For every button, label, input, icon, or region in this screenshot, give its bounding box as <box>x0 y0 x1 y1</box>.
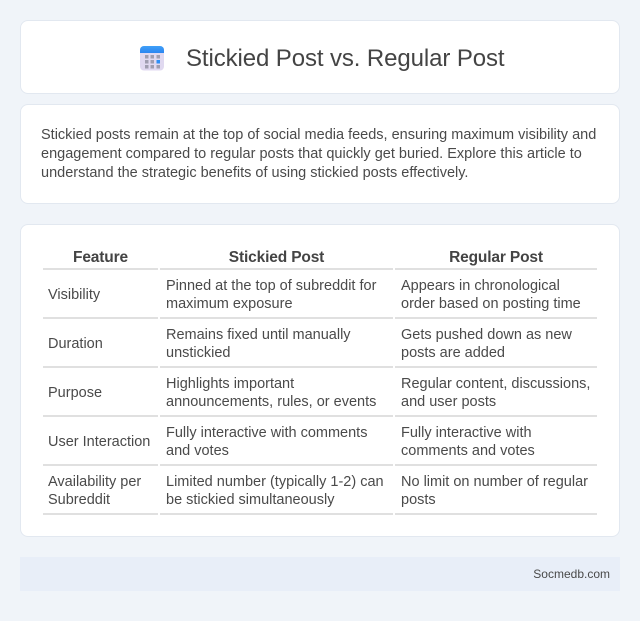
row: Duration: Remains fixed until manually <box>166 327 351 343</box>
text block: introduction <box>41 127 596 181</box>
row: Duration: unstickied <box>166 345 230 361</box>
title: Stickied Post vs. Regular Post <box>186 45 504 72</box>
row: User Interaction: Fully interactive with <box>401 425 532 441</box>
row: Duration: Gets pushed down as new <box>401 327 572 343</box>
column header: Stickied Post: Stickied Post <box>229 249 324 266</box>
row: Availability per Subreddit: Availability per <box>48 474 141 490</box>
row: Visibility: order based on posting time <box>401 296 581 312</box>
row: User Interaction: Fully interactive with comments <box>166 425 367 441</box>
row: Duration: posts are added <box>401 345 505 361</box>
row: Availability per Subreddit: posts <box>401 492 436 508</box>
row: Visibility: Appears in chronological <box>401 278 560 294</box>
column header: Feature: Feature <box>73 249 128 266</box>
row: Duration <box>48 327 572 361</box>
text block: introduction: Stickied posts remain at the top of social media feeds, ensuring maximum visibility and <box>41 127 596 143</box>
row: Visibility: maximum exposure <box>166 296 293 312</box>
row: Availability per Subreddit: Subreddit <box>48 492 110 508</box>
row: Purpose: and user posts <box>401 394 496 410</box>
row: User Interaction: and votes <box>166 443 229 459</box>
row: Purpose <box>48 376 590 410</box>
footer text: Socmedb.com <box>533 567 610 581</box>
row: Purpose: announcements, rules, or events <box>166 394 376 410</box>
column header: Regular Post: Regular Post <box>449 249 543 266</box>
panel: introduction <box>20 104 620 204</box>
row: Visibility: Visibility <box>48 287 100 303</box>
row: Availability per Subreddit: No limit on number of regular <box>401 474 588 490</box>
footer bar <box>20 557 620 591</box>
row: User Interaction: comments and votes <box>401 443 535 459</box>
row: Availability per Subreddit: Limited number (typically 1-2) can <box>166 474 384 490</box>
panel: comparison table <box>20 224 620 537</box>
row: User Interaction: User Interaction <box>48 434 150 450</box>
row: Availability per Subreddit <box>48 474 588 508</box>
row: Duration: Duration <box>48 336 103 352</box>
text block: introduction: engagement compared to regular posts that quickly get buried. Explore this article to <box>41 146 582 162</box>
row: Purpose: Highlights important <box>166 376 294 392</box>
row: Visibility: Pinned at the top of subreddit for <box>166 278 376 294</box>
panel: header <box>20 20 620 94</box>
text block: introduction: understand the strategic benefits of using stickied posts effectively. <box>41 165 468 181</box>
icon: calendar <box>140 46 164 70</box>
row: Purpose: Regular content, discussions, <box>401 376 590 392</box>
row: Purpose: Purpose <box>48 385 102 401</box>
row: User Interaction <box>48 425 535 459</box>
row: Availability per Subreddit: be stickied simultaneously <box>166 492 334 508</box>
row: Visibility <box>48 278 581 312</box>
